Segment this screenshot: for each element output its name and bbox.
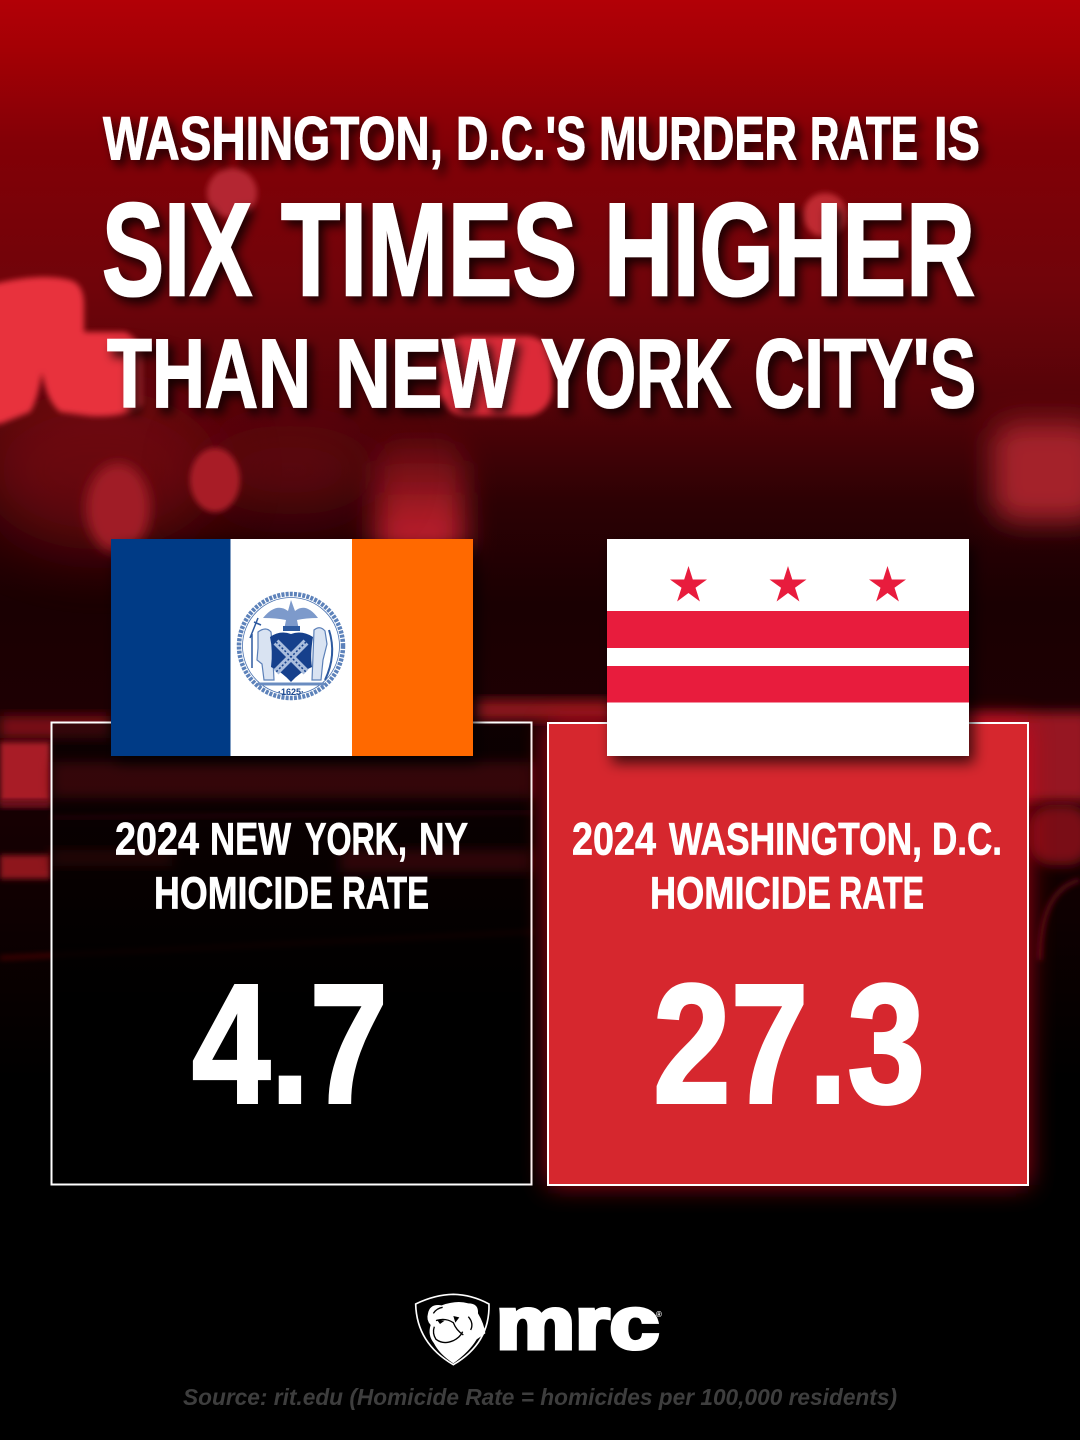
Washington label: HOMICIDE bbox=[650, 868, 831, 918]
registered mark: ® bbox=[656, 1310, 662, 1319]
New York label: NY bbox=[419, 814, 468, 864]
source note: Source: rit.edu (Homicide Rate = homicides per 100,000 residents) bbox=[183, 1384, 897, 1410]
flag: Washington, D.C. bbox=[607, 539, 969, 756]
panel background: Washington bbox=[548, 723, 1028, 1185]
Washington label: WASHINGTON, bbox=[669, 814, 922, 864]
icon: stars bbox=[670, 566, 906, 602]
title line 1: WASHINGTON, bbox=[103, 104, 443, 172]
New York label: YORK, bbox=[305, 814, 407, 864]
New York label: RATE bbox=[342, 868, 429, 918]
Washington label: RATE bbox=[839, 868, 924, 918]
icon: bulldog shield bbox=[416, 1294, 489, 1365]
New York label: HOMICIDE bbox=[154, 868, 333, 918]
New York label: 2024 bbox=[115, 814, 200, 864]
flag: New York City bbox=[111, 539, 473, 756]
New York rate: 4.7 bbox=[192, 950, 388, 1140]
title line 3: YORK bbox=[541, 319, 731, 428]
Washington rate: 27.3 bbox=[653, 950, 925, 1140]
Washington label: 2024 bbox=[572, 814, 657, 864]
seal year: ·1625· bbox=[278, 687, 304, 697]
title line 1: RATE bbox=[810, 104, 918, 172]
title line 1: IS bbox=[934, 104, 980, 172]
title bbox=[102, 104, 980, 428]
title line 1 bbox=[103, 104, 980, 172]
Washington label bbox=[572, 814, 1002, 918]
Washington label: D.C. bbox=[932, 814, 1002, 864]
panel glow bbox=[548, 723, 1028, 1185]
title line 1: MURDER bbox=[599, 104, 797, 172]
logo: mrc bbox=[416, 1284, 662, 1365]
title line 3: NEW bbox=[335, 319, 515, 428]
title line 2: TIMES bbox=[281, 176, 577, 323]
New York label bbox=[115, 814, 468, 918]
figures bbox=[257, 629, 274, 680]
panel: Washington, D.C. bbox=[548, 723, 1028, 1185]
wordmark: mrc bbox=[496, 1284, 659, 1364]
icon: city seal bbox=[239, 594, 343, 698]
panel background: New York bbox=[52, 722, 532, 1184]
title line 3: CITY'S bbox=[754, 319, 976, 428]
title line 3 bbox=[107, 319, 976, 428]
shield bbox=[270, 633, 313, 682]
title line 3: THAN bbox=[107, 319, 311, 428]
title line 2: SIX bbox=[102, 176, 252, 323]
title line 2 bbox=[102, 176, 975, 323]
title line 1: D.C.'S bbox=[456, 104, 586, 172]
panel: New York bbox=[52, 722, 532, 1184]
eagle bbox=[263, 600, 318, 630]
New York label: NEW bbox=[210, 814, 291, 864]
